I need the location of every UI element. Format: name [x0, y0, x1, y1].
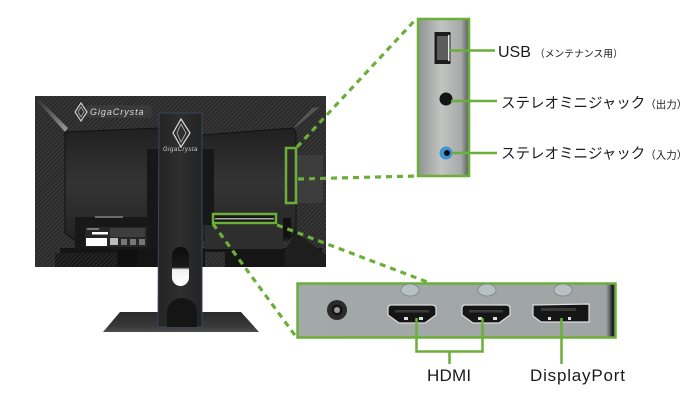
- monitor rear view: [35, 96, 326, 332]
- label: USB: USB （メンテナンス用）: [498, 44, 623, 61]
- label: HDMI: HDMI: [427, 366, 471, 385]
- icon: audio in jack: [440, 146, 452, 160]
- connector: DisplayPort: [560, 318, 563, 364]
- monitor rear housing: [35, 96, 326, 267]
- icon: USB port: [434, 32, 450, 64]
- lower dark band: [60, 248, 322, 267]
- label: audio in: ステレオミニジャック（入力）: [501, 146, 687, 162]
- highlight: side ports: [286, 148, 296, 203]
- panel: bottom port close-up: [298, 284, 616, 338]
- connector lines: side ports: [449, 50, 497, 153]
- icon: HDMI port 2: [462, 305, 510, 323]
- neck logo: GigaCrysta: [163, 147, 198, 153]
- top logo: GigaCrysta: [90, 107, 145, 117]
- compartment left: [75, 217, 158, 249]
- sticker label: [85, 227, 147, 247]
- icon: DisplayPort: [533, 304, 589, 322]
- label: DisplayPort: DisplayPort: [530, 366, 626, 385]
- cable hole: [172, 247, 189, 286]
- icon: HDMI port 1: [388, 305, 436, 323]
- connector: HDMI bracket: [416, 318, 482, 364]
- neck logo: [163, 119, 198, 153]
- label: audio out: ステレオミニジャック（出力）: [501, 95, 687, 112]
- highlight: bottom ports: [213, 214, 276, 223]
- panel: side port close-up: [418, 19, 469, 176]
- neck arch: [167, 298, 197, 327]
- top logo: [75, 103, 152, 121]
- side port bulge: [296, 155, 323, 203]
- VESA plate: [147, 149, 214, 225]
- icon: round jack: [327, 300, 347, 320]
- icon: audio out jack: [440, 92, 452, 106]
- dashed leader lines: [213, 18, 430, 338]
- compartment right: [205, 225, 283, 249]
- monitor base: [103, 312, 259, 332]
- neck: [158, 113, 202, 327]
- icon: screws: [401, 284, 572, 296]
